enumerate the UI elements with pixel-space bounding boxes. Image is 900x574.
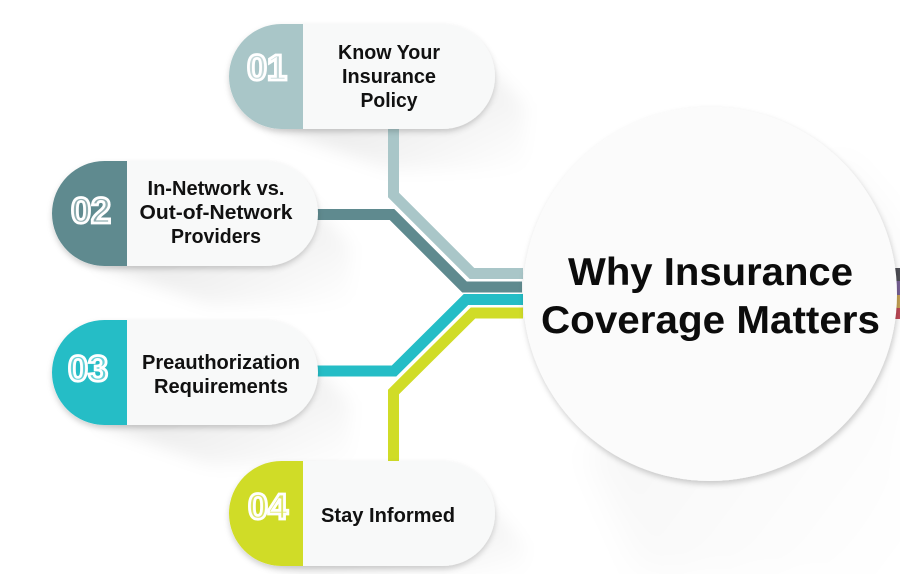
connector 04 [394, 313, 523, 462]
label 01: Policy [360, 90, 418, 112]
central circle [523, 107, 897, 481]
label 03: Preauthorization [142, 352, 300, 374]
label 03: Requirements [154, 376, 288, 398]
title: Coverage Matters [541, 299, 880, 342]
connector 03 [315, 300, 523, 371]
label 01: Know Your [338, 42, 440, 64]
connector 02 [315, 214, 522, 287]
panel: 04 Stay Informed [229, 461, 495, 566]
title [541, 251, 880, 342]
panel: 03 Preauthorization Requirements [52, 320, 318, 425]
label 02: Providers [171, 226, 261, 248]
label 04: Stay Informed [321, 505, 455, 527]
number 03: 03 [68, 348, 108, 389]
long shadows behind pills [95, 45, 525, 574]
title: Why Insurance [568, 251, 853, 294]
number 01: 01 [247, 47, 287, 88]
panel: 02 In-Network vs. Out-of-Network Providers [52, 161, 318, 266]
number 02: 02 [71, 190, 111, 231]
label 01: Insurance [342, 66, 436, 88]
number 04: 04 [248, 486, 288, 527]
connector 01 [394, 125, 523, 274]
label 01 [338, 42, 440, 112]
long shadow behind circle [590, 160, 900, 574]
label 02 [140, 178, 293, 248]
panel: 01 Know Your Insurance Policy [229, 24, 495, 129]
label 03 [142, 352, 300, 398]
label 02: In-Network vs. [148, 178, 284, 200]
label 02: Out-of-Network [140, 202, 293, 224]
side stripes at right edge [895, 268, 900, 319]
